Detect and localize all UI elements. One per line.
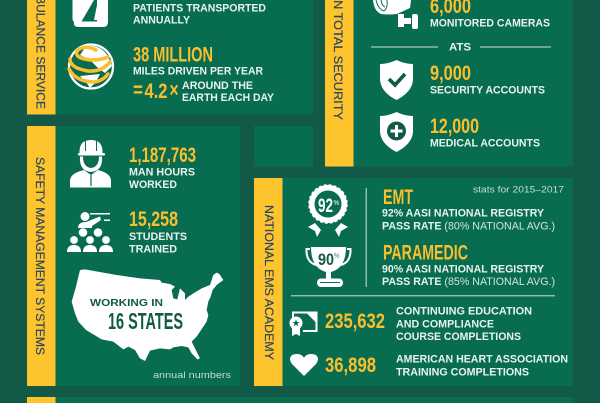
map caption bbox=[90, 297, 183, 334]
icon: 90 percent trophy: 90 bbox=[318, 251, 334, 269]
stat: miles driven: 4.2 bbox=[144, 80, 168, 103]
stat: heart association completions bbox=[325, 354, 568, 378]
divider: vertical rule bbox=[366, 188, 367, 287]
stat: miles driven: 38 MILLION bbox=[133, 44, 213, 66]
icon: ambulance patient bbox=[72, 0, 108, 27]
panel: small empty block bbox=[254, 126, 313, 166]
stat: security accounts: 9,000 bbox=[430, 62, 471, 85]
panel: total security bbox=[325, 0, 573, 166]
stat: students trained bbox=[129, 208, 187, 255]
stat: security accounts bbox=[430, 62, 545, 96]
stat: miles driven: EARTH EACH DAY bbox=[182, 92, 275, 104]
icon: globe bbox=[69, 44, 113, 88]
stat: patients transported bbox=[133, 2, 266, 27]
stat: students trained: 15,258 bbox=[129, 208, 178, 231]
panel: national EMS academy bbox=[254, 178, 573, 386]
stat: paramedic pass rate bbox=[382, 242, 555, 288]
icon: construction worker bbox=[70, 140, 111, 188]
stat: course completions: CONTINUING EDUCATION bbox=[396, 306, 532, 318]
icon: shield check bbox=[380, 60, 413, 100]
icon: 90 percent trophy: % bbox=[334, 253, 340, 260]
divider: horizontal rule bbox=[291, 295, 555, 296]
stat: course completions: 235,632 bbox=[325, 310, 385, 333]
stat: EMT pass rate: 92% AASI NATIONAL REGISTRY bbox=[382, 208, 545, 220]
icon: 92 percent badge: 92 bbox=[318, 196, 333, 217]
icon: 90 percent trophy bbox=[306, 247, 351, 287]
stat: monitored cameras: MONITORED CAMERAS bbox=[430, 18, 550, 30]
stat: course completions: COURSE COMPLETIONS bbox=[396, 331, 521, 343]
stat: miles driven: × bbox=[170, 79, 178, 102]
sidebar label: national EMS academy: NATIONAL EMS ACADEMY bbox=[262, 205, 276, 360]
stat: miles driven: AROUND THE bbox=[182, 80, 253, 92]
icon: security camera bbox=[373, 0, 418, 29]
icon: 92 percent badge bbox=[308, 185, 348, 237]
map caption: WORKING IN bbox=[90, 297, 163, 309]
stat: heart association completions: TRAINING COMPLETIONS bbox=[396, 366, 529, 378]
stat: miles driven bbox=[133, 44, 275, 104]
sidebar label: safety management systems: SAFETY MANAGEMENT SYSTEMS bbox=[33, 157, 47, 355]
panel: bottom cropped block bbox=[27, 397, 573, 403]
icon: shield plus bbox=[380, 112, 413, 152]
panel: ambulance service bbox=[27, 0, 313, 114]
note: stats years: stats for 2015–2017 bbox=[473, 185, 564, 196]
stat: EMT pass rate: PASS RATE (80% NATIONAL AVG.) bbox=[382, 221, 555, 233]
stat: medical accounts: MEDICAL ACCOUNTS bbox=[430, 137, 540, 149]
stat: monitored cameras bbox=[430, 0, 550, 30]
icon: instructor and students bbox=[67, 212, 113, 252]
stat: course completions: AND COMPLIANCE bbox=[396, 318, 494, 330]
divider: ATS: ATS bbox=[449, 41, 471, 53]
stat: students trained: TRAINED bbox=[129, 243, 177, 255]
stat: man hours: 1,187,763 bbox=[129, 144, 196, 167]
icon: certificate bbox=[290, 312, 316, 336]
stat: man hours: WORKED bbox=[129, 179, 177, 191]
icon: 92 percent badge: % bbox=[334, 198, 339, 207]
map caption: 16 STATES bbox=[108, 308, 183, 334]
stat: man hours: MAN HOURS bbox=[129, 167, 195, 179]
stat: paramedic pass rate: 90% AASI NATIONAL REGISTRY bbox=[382, 263, 545, 275]
stat: paramedic pass rate: PARAMEDIC bbox=[383, 242, 468, 264]
stat: heart association completions: AMERICAN HEART ASSOCIATION bbox=[396, 354, 568, 366]
stat: EMT pass rate: EMT bbox=[383, 186, 413, 209]
stat: miles driven: MILES DRIVEN PER YEAR bbox=[133, 66, 263, 78]
stat: man hours bbox=[129, 144, 196, 191]
stat: medical accounts: 12,000 bbox=[430, 115, 479, 138]
icon: heart bbox=[290, 354, 318, 376]
note: annual numbers: annual numbers bbox=[153, 370, 231, 381]
stat: paramedic pass rate: PASS RATE (85% NATIONAL AVG.) bbox=[382, 276, 555, 288]
stat: miles driven: = bbox=[133, 79, 143, 102]
stat: security accounts: SECURITY ACCOUNTS bbox=[430, 84, 545, 96]
stat: students trained: STUDENTS bbox=[129, 231, 187, 243]
stat: patients transported: PATIENTS TRANSPORTED bbox=[133, 2, 266, 14]
stat: course completions bbox=[325, 306, 532, 343]
stat: medical accounts bbox=[430, 115, 540, 149]
stat: EMT pass rate bbox=[382, 186, 555, 233]
map: United States bbox=[72, 269, 223, 361]
stat: patients transported: ANNUALLY bbox=[133, 15, 191, 27]
panel: safety management systems bbox=[27, 126, 240, 386]
stat: heart association completions: 36,898 bbox=[325, 354, 376, 377]
